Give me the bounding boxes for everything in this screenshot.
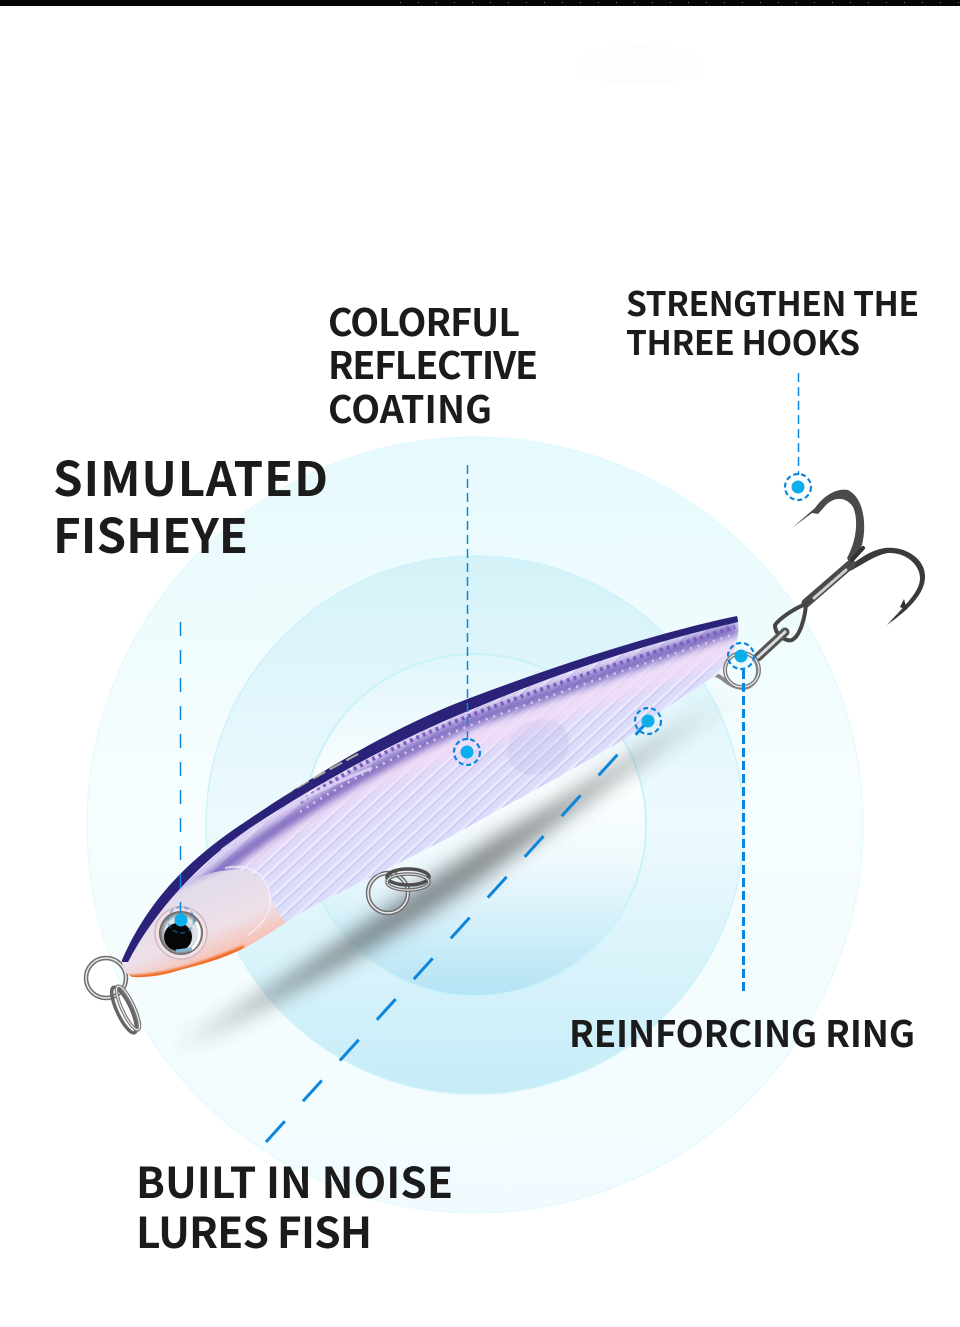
treble hook: [758, 490, 925, 657]
dark back: [118, 612, 740, 962]
eye: [155, 907, 207, 959]
label: simulated fisheye: SIMULATED: [53, 441, 328, 510]
back speckles: [300, 627, 735, 802]
concentric blue circles: [87, 437, 863, 1213]
label: colorful reflective coating: REFLECTIVE: [328, 335, 538, 390]
tail eyelet: [712, 660, 758, 688]
head: [122, 870, 286, 978]
pink highlight under back: [240, 644, 737, 860]
split ring link: [758, 632, 785, 657]
callout line: reflective coating: [454, 465, 480, 765]
label: built in noise lures fish: [136, 1150, 453, 1261]
purple fade under back: [190, 628, 737, 895]
scales ribs: [172, 624, 738, 920]
label: simulated fisheye: [53, 441, 328, 567]
hook eye: [775, 604, 806, 640]
orange belly: [127, 944, 246, 978]
faint smudge near top: [575, 45, 705, 85]
label: reinforcing ring: REINFORCING RING: [569, 1005, 915, 1058]
callout line: three hooks: [785, 373, 811, 500]
callout line: reinforcing ring: [728, 643, 754, 993]
nose ring: [86, 958, 144, 1036]
belly ring: [368, 869, 429, 913]
label: built in noise lures fish: LURES FISH: [136, 1200, 372, 1261]
top black noise strip: [0, 0, 960, 6]
lure cast shadow: [172, 690, 745, 1050]
label: strengthen the three hooks: STRENGTHEN THE: [626, 277, 919, 326]
label: built in noise lures fish: BUILT IN NOISE: [136, 1150, 453, 1211]
label: strengthen the three hooks: THREE HOOKS: [626, 316, 860, 365]
label: colorful reflective coating: COATING: [328, 379, 492, 434]
shank: [806, 564, 851, 603]
back light line: [280, 753, 358, 798]
callout line: simulated fisheye: [168, 622, 194, 933]
rattle chamber: [508, 719, 569, 775]
lure body: [122, 616, 738, 978]
label: simulated fisheye: FISHEYE: [53, 498, 248, 567]
fishing lure: [86, 490, 925, 1036]
label: strengthen the three hooks: [626, 277, 919, 365]
label: colorful reflective coating: COLORFUL: [328, 292, 520, 347]
callout line: built in noise: [266, 708, 661, 1142]
tail eye ring: [725, 653, 759, 687]
hook point two: [848, 548, 925, 625]
hook point one: [792, 490, 864, 566]
label: colorful reflective coating: [328, 292, 538, 434]
